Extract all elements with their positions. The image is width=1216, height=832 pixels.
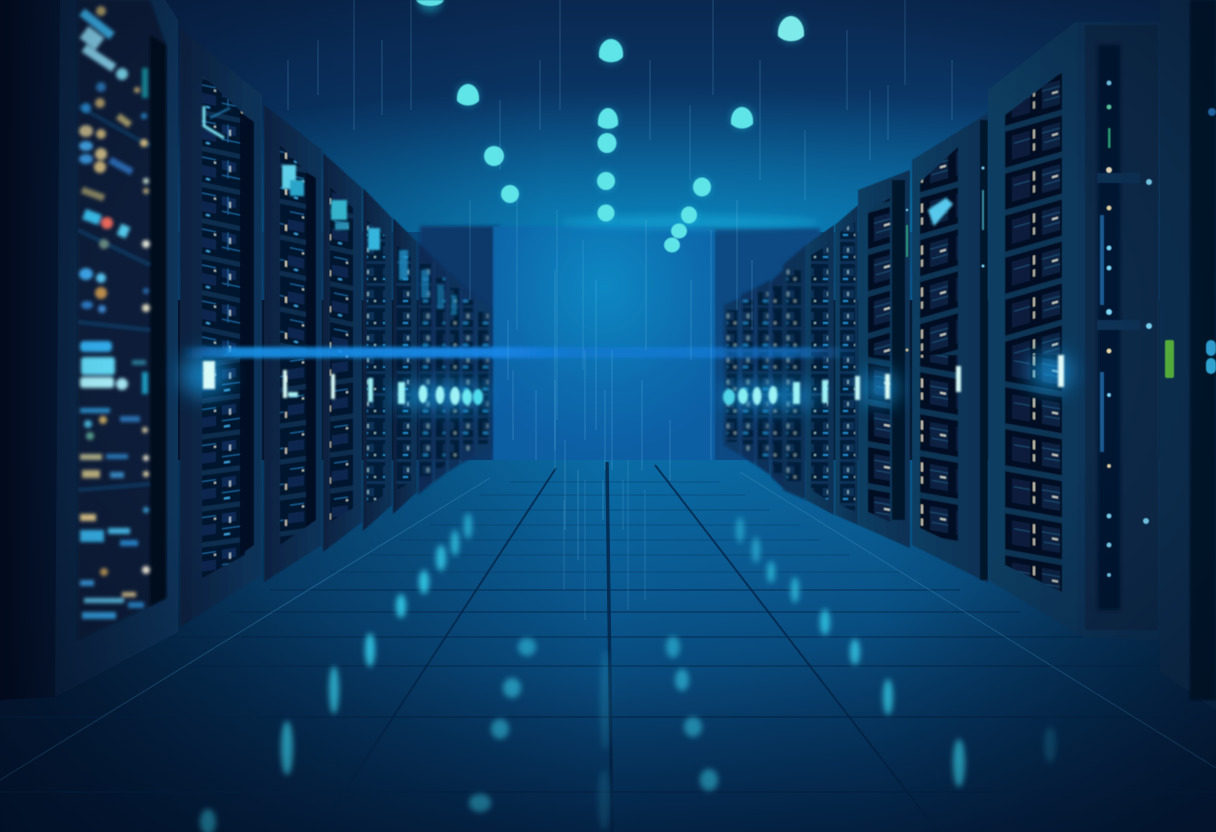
horizontal light beam xyxy=(180,347,860,358)
background: end walls beside door xyxy=(420,226,820,468)
rack 4 xyxy=(323,153,362,552)
right rack row xyxy=(724,0,1216,710)
rack R7 xyxy=(835,205,858,525)
rack 1 (nearest) xyxy=(0,0,178,700)
right rack side LEDs xyxy=(906,80,1152,577)
lamp domes xyxy=(416,0,804,252)
rack R10 xyxy=(988,22,1160,640)
rack 3 xyxy=(264,105,322,582)
rack 6 xyxy=(393,218,417,514)
blue glow behind status lights xyxy=(181,352,1072,408)
floor tile joints xyxy=(0,462,1216,832)
green indicator xyxy=(1165,340,1174,378)
cyan status lights row xyxy=(203,355,1064,405)
rack 5 xyxy=(363,188,392,531)
rack R8 xyxy=(858,170,910,548)
floor reflections of lights xyxy=(200,513,1056,832)
bright details on left racks xyxy=(204,106,457,315)
rack 1 status lights xyxy=(79,6,150,619)
falling light streaks xyxy=(288,0,952,620)
far right racks xyxy=(724,245,806,500)
rack R9 led detail xyxy=(928,198,953,226)
rack R6 xyxy=(806,225,834,515)
rack R9 xyxy=(912,113,988,583)
rack 1 shelf dividers xyxy=(78,106,150,490)
left rack row xyxy=(0,0,491,700)
lamp glow xyxy=(418,0,804,223)
rack 2 xyxy=(180,28,262,627)
ceiling pendant lights xyxy=(416,0,804,252)
floor xyxy=(0,460,1216,832)
glow at ceiling edge xyxy=(560,215,820,229)
nearest right rack xyxy=(1160,0,1216,710)
far left racks xyxy=(418,242,491,495)
back wall panel xyxy=(493,226,715,466)
background: ceiling xyxy=(0,0,1216,300)
